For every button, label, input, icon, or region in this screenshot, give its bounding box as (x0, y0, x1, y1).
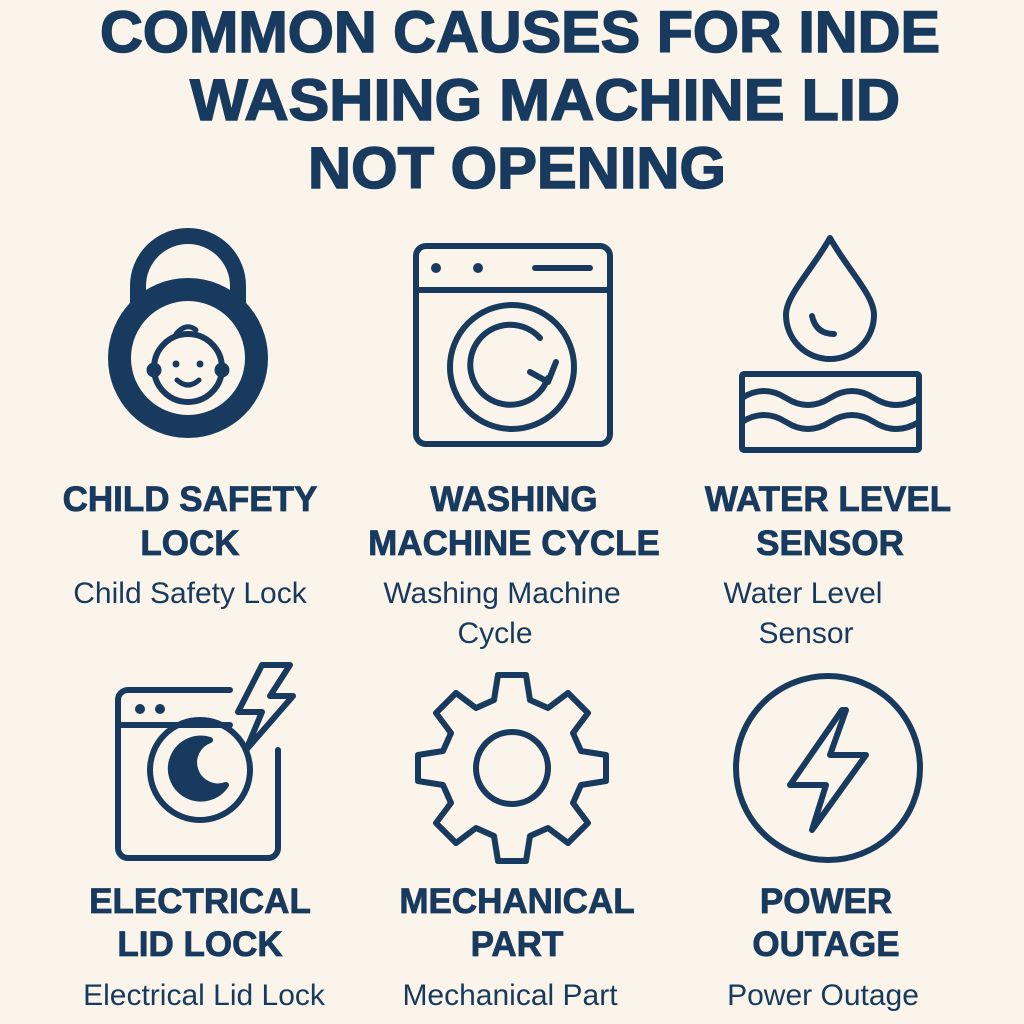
label: mechanical part: PART (471, 925, 563, 964)
title: WASHING MACHINE LID (190, 68, 900, 133)
label: child safety lock: CHILD SAFETY (63, 480, 317, 519)
label: mechanical part (399, 882, 635, 1012)
label: child safety lock: LOCK (140, 524, 240, 563)
label: water level sensor: Sensor (758, 617, 854, 650)
icon: power outage (736, 676, 920, 860)
label: water level sensor: Water Level (724, 577, 882, 610)
label: water level sensor: SENSOR (756, 524, 904, 563)
title: COMMON CAUSES FOR INDE (100, 0, 940, 65)
label: washing machine cycle (368, 480, 660, 650)
icon: electrical lid lock (118, 665, 293, 858)
label: washing machine cycle: Cycle (457, 617, 533, 650)
icon: gear (418, 675, 606, 861)
label: child safety lock (63, 480, 317, 610)
label: washing machine cycle: WASHING (430, 480, 598, 519)
label: washing machine cycle: MACHINE CYCLE (368, 524, 660, 563)
label: mechanical part: Mechanical Part (402, 979, 618, 1012)
label: electrical lid lock: ELECTRICAL (89, 882, 311, 921)
icon: child safety lock (108, 236, 268, 438)
label: electrical lid lock (83, 882, 326, 1012)
title (100, 0, 940, 201)
label: mechanical part: MECHANICAL (399, 882, 635, 921)
label: electrical lid lock: Electrical Lid Lock (83, 979, 326, 1012)
label: washing machine cycle: Washing Machine (383, 577, 621, 610)
label: power outage (727, 882, 919, 1012)
label: electrical lid lock: LID LOCK (117, 925, 283, 964)
label: child safety lock: Child Safety Lock (73, 577, 308, 610)
label: power outage: OUTAGE (752, 925, 900, 964)
label: water level sensor: WATER LEVEL (705, 480, 951, 519)
icon: washing machine cycle (416, 246, 610, 444)
label: water level sensor (705, 480, 951, 650)
label: power outage: POWER (760, 882, 892, 921)
label: power outage: Power Outage (727, 979, 919, 1012)
title: NOT OPENING (308, 136, 726, 201)
icon: water level sensor (742, 238, 919, 450)
